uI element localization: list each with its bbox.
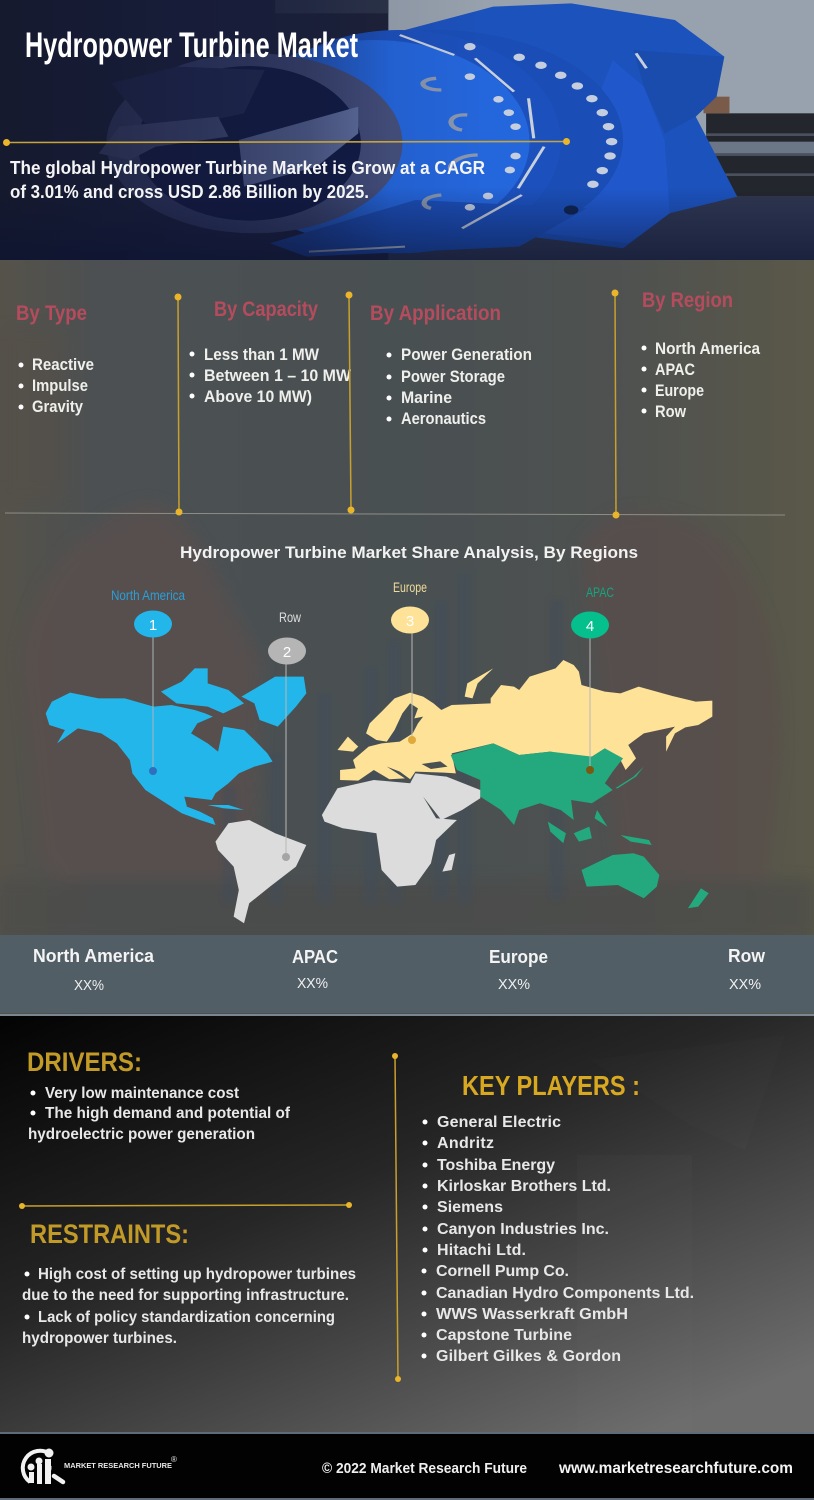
value: apac xyxy=(292,947,338,992)
segment: by region: Row xyxy=(655,403,686,421)
marker 3: europe: Europe xyxy=(393,579,427,595)
marker 1: north america: 1 xyxy=(149,617,157,634)
segment: by type: By Type xyxy=(16,302,87,325)
segment: by region: Europe xyxy=(655,382,704,400)
key players: Canyon Industries Inc. xyxy=(437,1221,609,1238)
marker 2: row: Row xyxy=(279,609,302,625)
region: north america xyxy=(46,668,306,825)
segment: by type: Gravity xyxy=(32,398,84,416)
segment: by type: Reactive xyxy=(32,356,94,374)
restraints: High cost of setting up hydropower turbines xyxy=(38,1266,356,1283)
key players: Andritz xyxy=(437,1135,494,1152)
map heading: Hydropower Turbine Market Share Analysis, By Regions xyxy=(180,543,638,562)
drivers: Very low maintenance cost xyxy=(45,1085,240,1102)
website: www.marketresearchfuture.com xyxy=(558,1460,793,1477)
value: apac: XX% xyxy=(297,975,328,992)
restraints: RESTRAINTS: xyxy=(30,1219,189,1249)
marker 1: north america: North America xyxy=(111,587,185,603)
segment: by region xyxy=(642,289,761,421)
segment: by application: By Application xyxy=(370,302,501,325)
value: row: XX% xyxy=(729,976,761,993)
segment: by type xyxy=(16,302,94,416)
hero summary text xyxy=(10,158,485,202)
restraints: Lack of policy standardization concerning xyxy=(38,1309,335,1326)
segment: by capacity: Between 1 – 10 MW xyxy=(204,367,351,385)
value: apac: APAC xyxy=(292,947,338,967)
key players: Cornell Pump Co. xyxy=(436,1263,569,1280)
logo: market research future xyxy=(23,1448,177,1484)
title: Hydropower Turbine Market xyxy=(25,26,358,65)
hero summary text: of 3.01% and cross USD 2.86 Billion by 2025. xyxy=(10,182,369,202)
value: europe: Europe xyxy=(489,947,548,967)
key players: KEY PLAYERS : xyxy=(462,1070,640,1101)
logo: market research future: ® xyxy=(171,1455,177,1464)
segment: by capacity: Above 10 MW) xyxy=(204,388,312,406)
dark panel: drivers, restraints and key players xyxy=(0,1014,814,1433)
region: rest of world xyxy=(215,773,480,923)
segment: by capacity: Less than 1 MW xyxy=(204,346,319,364)
key players xyxy=(422,1070,694,1365)
copyright: © 2022 Market Research Future xyxy=(322,1460,527,1477)
value: row xyxy=(728,946,766,993)
key players: General Electric xyxy=(437,1114,561,1131)
divider: drivers and restraints xyxy=(19,1202,352,1209)
key players: Toshiba Energy xyxy=(437,1157,555,1174)
marker 3: europe: 3 xyxy=(406,613,414,630)
key players: WWS Wasserkraft GmbH xyxy=(436,1306,628,1323)
hero banner: turbine photo xyxy=(0,0,814,260)
segment: by type: Impulse xyxy=(32,377,88,395)
marker 4: apac: APAC xyxy=(586,584,614,600)
restraints: due to the need for supporting infrastructure. xyxy=(22,1287,349,1304)
logo: market research future: MARKET RESEARCH FUTURE xyxy=(64,1461,172,1470)
value: europe xyxy=(489,947,548,993)
segment: by application xyxy=(370,302,532,428)
dividers: segment gold lines xyxy=(5,290,785,518)
strip: regional values background xyxy=(0,935,814,1013)
key players: Hitachi Ltd. xyxy=(437,1242,526,1259)
drivers: DRIVERS: xyxy=(27,1047,142,1077)
value: row: Row xyxy=(728,946,766,966)
key players: Kirloskar Brothers Ltd. xyxy=(437,1178,611,1195)
marker 2: row xyxy=(268,609,306,861)
drivers xyxy=(27,1047,291,1143)
value: north america: XX% xyxy=(74,977,104,994)
divider: key players xyxy=(392,1053,401,1382)
region: black sea xyxy=(422,761,448,769)
segment: by capacity: By Capacity xyxy=(214,298,318,321)
region: europe and russia xyxy=(337,660,712,781)
drivers: The high demand and potential of xyxy=(45,1105,291,1122)
key players: Siemens xyxy=(437,1199,503,1216)
key players: Capstone Turbine xyxy=(436,1327,572,1344)
segment: by region: APAC xyxy=(655,361,695,379)
segment: by region: By Region xyxy=(642,289,733,312)
restraints xyxy=(22,1219,356,1347)
marker 4: apac: 4 xyxy=(586,618,594,635)
region: asia pacific xyxy=(451,743,709,908)
divider: hero gold line xyxy=(3,138,570,146)
key players: Gilbert Gilkes & Gordon xyxy=(436,1348,621,1365)
marker 2: row: 2 xyxy=(283,644,291,661)
value: north america xyxy=(33,946,155,994)
marker 4: apac xyxy=(571,584,614,774)
world map xyxy=(46,660,712,923)
segment: by application: Power Generation xyxy=(401,346,532,364)
segment: by application: Aeronautics xyxy=(401,410,486,428)
drivers: hydroelectric power generation xyxy=(28,1126,255,1143)
segment: by application: Marine xyxy=(401,389,452,407)
value: north america: North America xyxy=(33,946,155,966)
key players: Canadian Hydro Components Ltd. xyxy=(436,1285,694,1302)
segment: by capacity xyxy=(190,298,351,406)
footer bar xyxy=(0,1432,814,1500)
marker 3: europe xyxy=(391,579,429,744)
background panel: segmentation and map xyxy=(0,260,814,1015)
restraints: hydropower turbines. xyxy=(22,1330,177,1347)
segment: by region: North America xyxy=(655,340,761,358)
value: europe: XX% xyxy=(498,976,530,993)
marker 1: north america xyxy=(111,587,185,775)
segment: by application: Power Storage xyxy=(401,368,505,386)
hero summary text: The global Hydropower Turbine Market is Grow at a CAGR xyxy=(10,158,485,178)
